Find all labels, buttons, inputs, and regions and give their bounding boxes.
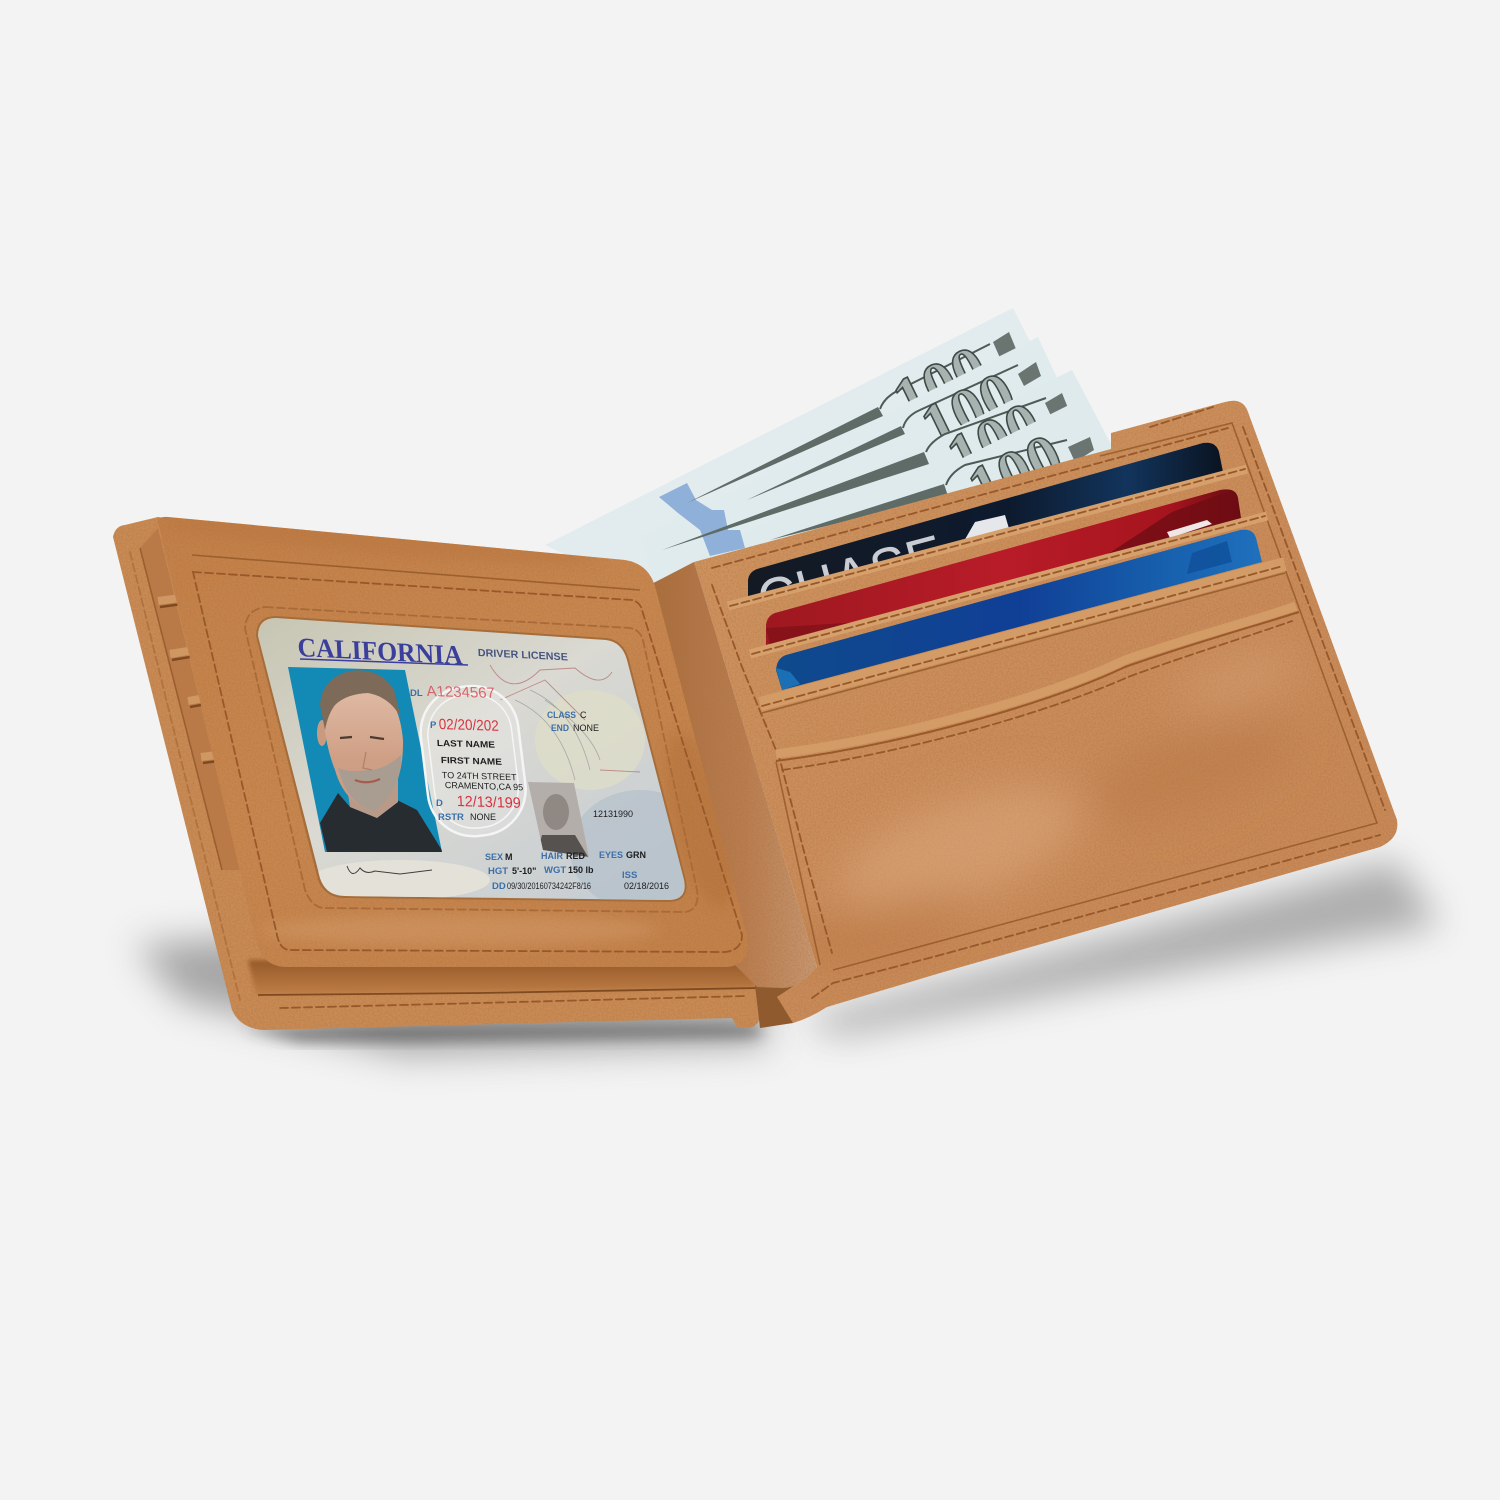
paper band	[659, 483, 745, 556]
license fields: 150 lb	[568, 865, 594, 875]
license fields: 12/13/199	[456, 793, 521, 812]
right panel base leather	[694, 401, 1397, 1023]
eyes and mouth	[340, 737, 384, 739]
license fields: GRN	[626, 850, 646, 860]
left wallet back panel	[113, 517, 760, 1030]
subtitle: driver license: DRIVER LICENSE	[478, 647, 568, 663]
license fields: RED	[566, 851, 586, 861]
bill four	[760, 397, 1114, 570]
lower seam	[258, 988, 757, 995]
driver license	[258, 618, 685, 900]
banknotes	[545, 308, 1114, 600]
credit cards	[748, 443, 1262, 690]
license fields: CRAMENTO,CA 95	[445, 780, 523, 792]
bill four: 100	[957, 420, 1073, 525]
card brand logo	[965, 515, 1009, 539]
face	[325, 693, 404, 806]
leather mottling	[810, 650, 1290, 960]
underline	[300, 659, 468, 665]
license fields: 09/30/20160734242F8/16	[507, 881, 591, 891]
card: blue	[776, 530, 1262, 690]
license fields: DD	[492, 881, 506, 892]
ear	[317, 720, 327, 746]
license fields: 02/18/2016	[624, 881, 669, 891]
outer seam	[833, 423, 1377, 970]
beard	[338, 755, 401, 811]
left pocket stack	[130, 528, 240, 1000]
license fields: 5'-10"	[512, 866, 536, 876]
pocket strip three	[760, 564, 1285, 704]
license fields: FIRST NAME	[441, 755, 502, 767]
license fields: TO 24TH STREET	[442, 770, 517, 782]
flap ridge	[192, 555, 640, 590]
license fields: ISS	[622, 870, 637, 881]
bill one: 100	[882, 332, 998, 437]
strip stitching	[730, 469, 1245, 606]
pocket strip one	[728, 469, 1247, 606]
license fields: SEX	[485, 852, 504, 863]
shirt	[320, 793, 443, 852]
bill one	[545, 308, 1085, 600]
photo	[288, 667, 442, 852]
flap stitching	[193, 572, 742, 952]
license fields: END	[551, 723, 569, 734]
license fields: 02/20/202	[438, 716, 499, 735]
signature	[347, 866, 432, 874]
license fields: NONE	[470, 812, 496, 822]
license fields: HAIR	[541, 851, 563, 862]
bill three	[700, 370, 1114, 600]
bottom hinge	[755, 985, 795, 1028]
license background	[258, 618, 685, 900]
map lines	[490, 665, 640, 772]
title: CALIFORNIA: CALIFORNIA	[297, 632, 464, 670]
card: Chase black	[748, 442, 1223, 596]
lower curved pocket	[776, 606, 1299, 965]
outer stitching	[1150, 407, 1213, 427]
license fields: C	[580, 710, 587, 720]
neck	[348, 779, 398, 818]
license fields: EYES	[599, 850, 623, 861]
engraved spikes	[662, 407, 948, 550]
license fields: NONE	[573, 723, 599, 733]
ID window rim	[256, 616, 687, 902]
hologram oval	[419, 684, 527, 838]
license fields: CLASS	[547, 710, 576, 721]
card: red	[766, 489, 1241, 645]
license fields: D	[436, 798, 443, 809]
ghost photo	[528, 782, 589, 857]
wallet spine	[640, 562, 817, 988]
hair	[320, 670, 401, 730]
lower stitching	[280, 996, 745, 1008]
license fields: DL	[410, 688, 423, 699]
license fields: M	[505, 852, 512, 862]
pocket edges and stitching	[728, 469, 1285, 713]
pocket strip two	[750, 516, 1267, 654]
window stitching	[245, 607, 698, 912]
wallet product scene	[113, 308, 1448, 1076]
flap mottling	[160, 507, 747, 946]
under-flap shaded band	[248, 960, 757, 995]
right wallet panel	[694, 401, 1397, 1023]
bill two: 100	[910, 358, 1026, 463]
ID flap	[158, 507, 748, 967]
bill two	[640, 337, 1100, 600]
ground shadows	[135, 860, 1440, 1055]
license fields: 12131990	[593, 809, 633, 819]
license fields: LAST NAME	[437, 738, 495, 750]
card brand wordmark: CHASE	[751, 523, 951, 635]
license fields: RSTR	[438, 812, 464, 823]
license fields	[410, 683, 669, 892]
bill three: 100	[936, 388, 1052, 493]
license fields: HGT	[488, 866, 508, 877]
license fields: WGT	[544, 865, 566, 876]
license fields: P	[430, 720, 437, 731]
license fields: A1234567	[426, 683, 496, 702]
